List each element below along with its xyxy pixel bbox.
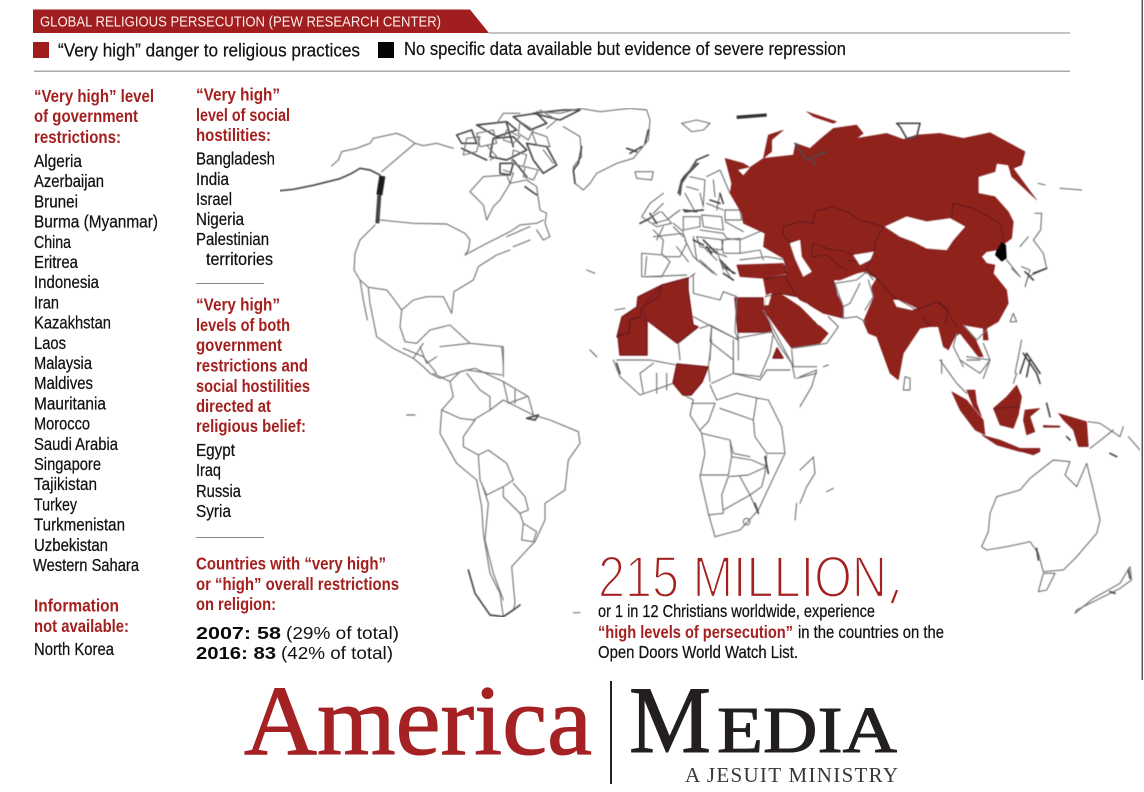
- heading: both restrictions and hostilities: religious belief:: [196, 416, 306, 436]
- country list: government restrictions: Azerbaijan: [34, 171, 104, 191]
- country list: government restrictions: Burma (Myanmar): [34, 212, 158, 232]
- europe and north africa outlines: [640, 163, 787, 360]
- country list: government restrictions: Eritrea: [34, 252, 78, 272]
- country list: government restrictions: Brunei: [34, 191, 78, 211]
- country: north korea: North Korea: [34, 639, 114, 659]
- asia outlines: [700, 115, 1082, 378]
- legend item: no specific data: No specific data available but evidence of severe repression: [404, 39, 846, 59]
- country list: social hostilities: Israel: [196, 189, 232, 209]
- legend: [33, 39, 846, 60]
- column: social hostilities: [196, 85, 399, 663]
- country list: government restrictions: [33, 151, 158, 575]
- heading: social hostilities: level of social: [196, 105, 290, 125]
- statistics: 2007 and 2016: (29% of total): [286, 623, 399, 643]
- callout text: Open Doors World Watch List.: [598, 642, 798, 662]
- heading: social hostilities: hostilities:: [196, 125, 271, 145]
- africa outlines: [590, 340, 790, 537]
- heading: information not available: Information: [34, 596, 119, 616]
- heading: government restrictions: restrictions:: [34, 127, 121, 147]
- heading: overall restrictions: or “high” overall restrictions: [196, 574, 399, 594]
- country list: social hostilities: Nigeria: [196, 209, 244, 229]
- country list: government restrictions: Uzbekistan: [34, 535, 108, 555]
- heading: both restrictions and hostilities: restrictions and: [196, 355, 308, 375]
- country list: social hostilities: [196, 148, 275, 269]
- country list: social hostilities: Bangladesh: [196, 148, 275, 168]
- heading: social hostilities: [196, 85, 290, 145]
- heading: government restrictions: [34, 86, 154, 147]
- country list: government restrictions: Laos: [34, 333, 66, 353]
- red countries: asia: [725, 112, 1037, 380]
- country list: social hostilities: Palestinian: [196, 229, 269, 249]
- logo divider: [610, 681, 612, 784]
- country list: government restrictions: Malaysia: [34, 353, 92, 373]
- statistics: 2007 and 2016: 2007: 58: [196, 623, 281, 643]
- heading: both restrictions and hostilities: social hostilities: [196, 376, 310, 396]
- column: government restrictions: [33, 86, 158, 659]
- heading: both restrictions and hostilities: “Very high”: [196, 295, 280, 315]
- heading: both restrictions and hostilities: levels of both: [196, 315, 290, 335]
- legend item: very high danger: “Very high” danger to religious practices: [58, 40, 360, 60]
- country list: government restrictions: Singapore: [34, 454, 101, 474]
- country list: government restrictions: Kazakhstan: [34, 313, 111, 333]
- country list: government restrictions: Turkey: [34, 494, 77, 514]
- callout text: [598, 601, 944, 662]
- country list: both: [196, 440, 241, 521]
- callout text: “high levels of persecution”: [598, 622, 793, 642]
- country list: government restrictions: Tajikistan: [34, 474, 97, 494]
- statistics: 2007 and 2016: (42% of total): [281, 643, 393, 663]
- country list: government restrictions: Saudi Arabia: [34, 434, 118, 454]
- southeast asia and oceania: [795, 343, 1140, 613]
- country list: social hostilities: territories: [206, 249, 273, 269]
- country list: government restrictions: Morocco: [34, 414, 90, 434]
- heading: both restrictions and hostilities: government: [196, 335, 282, 355]
- heading: overall restrictions: Countries with “very high”: [196, 554, 386, 574]
- heading: overall restrictions: [196, 554, 399, 614]
- country list: government restrictions: Western Sahara: [33, 555, 139, 575]
- wordmark: Media: M: [629, 667, 711, 773]
- logo: America Media: [244, 665, 898, 787]
- country list: government restrictions: Iran: [34, 292, 59, 312]
- heading: both restrictions and hostilities: [196, 295, 310, 436]
- banner title: GLOBAL RELIGIOUS PERSECUTION (PEW RESEARCH CENTER): [40, 14, 441, 30]
- country list: government restrictions: Mauritania: [34, 393, 106, 413]
- callout: 215 million: [598, 545, 944, 662]
- tagline: A JESUIT MINISTRY: [685, 763, 898, 787]
- north america outlines: [280, 108, 710, 378]
- wordmark: Media: [629, 667, 897, 773]
- country list: social hostilities: India: [196, 169, 229, 189]
- statistics: 2007 and 2016: [196, 623, 399, 663]
- statistics: 2007 and 2016: 2016: 83: [196, 643, 276, 663]
- arctic archipelago: [457, 110, 580, 195]
- wordmark: Media: EDIA: [717, 694, 897, 767]
- inland seas and uncoloured countries: [738, 167, 965, 325]
- heading: information not available: not available:: [34, 616, 129, 636]
- heading: government restrictions: of government: [34, 106, 138, 126]
- country list: government restrictions: Maldives: [34, 373, 93, 393]
- callout text: in the countries on the: [798, 622, 944, 642]
- heading: information not available: [34, 596, 129, 636]
- country list: government restrictions: Turkmenistan: [34, 515, 125, 535]
- heading: social hostilities: “Very high”: [196, 85, 280, 105]
- country list: both: Russia: [196, 481, 241, 501]
- header banner: [33, 10, 489, 33]
- callout text: or 1 in 12 Christians worldwide, experience: [598, 601, 875, 621]
- country list: government restrictions: Algeria: [34, 151, 82, 171]
- big number: 215 MILLION: [598, 545, 887, 610]
- country list: both: Iraq: [196, 460, 221, 480]
- world map: [280, 108, 1140, 617]
- heading: government restrictions: “Very high” level: [34, 86, 154, 106]
- country list: both: Syria: [196, 501, 231, 521]
- country list: government restrictions: China: [34, 232, 71, 252]
- south america outlines: [403, 347, 580, 617]
- red countries: africa: [617, 278, 783, 395]
- wordmark: America: America: [244, 665, 592, 776]
- country list: government restrictions: Indonesia: [34, 272, 99, 292]
- country list: both: Egypt: [196, 440, 235, 460]
- heading: overall restrictions: on religion:: [196, 594, 276, 614]
- heading: both restrictions and hostilities: directed at: [196, 396, 271, 416]
- comma: [892, 590, 897, 603]
